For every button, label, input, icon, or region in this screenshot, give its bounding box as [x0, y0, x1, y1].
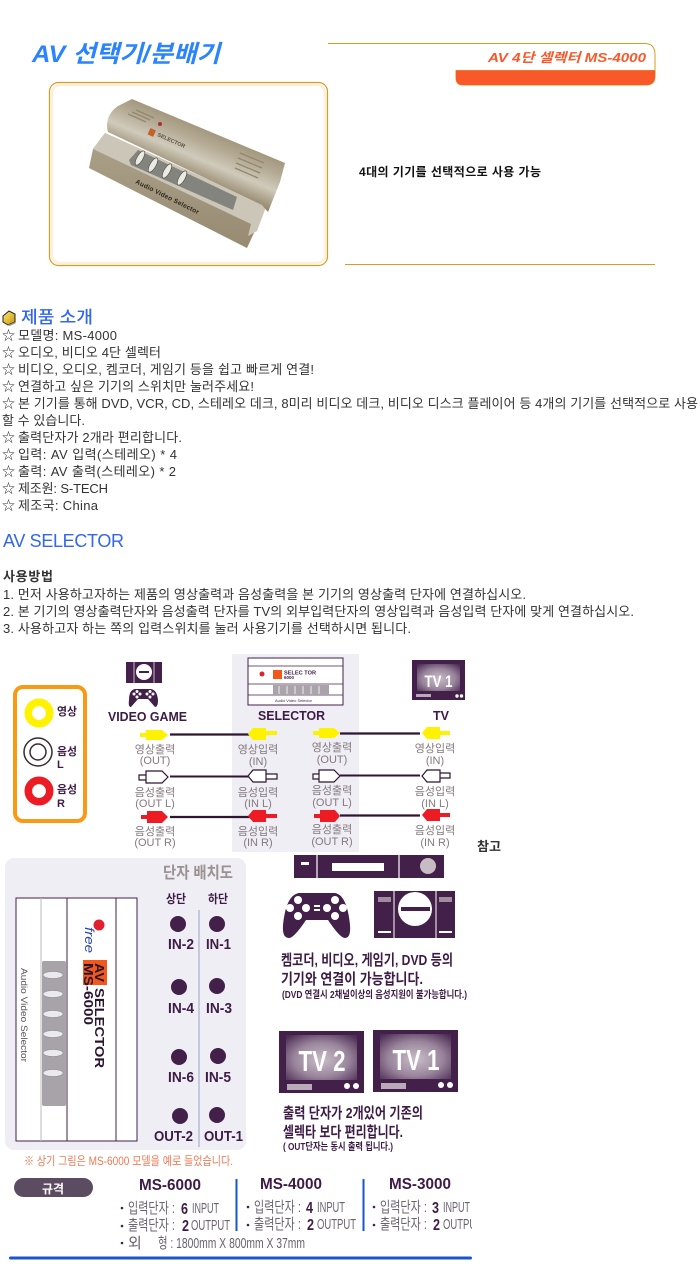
text block: usage steps: [3, 587, 634, 636]
panel: product model heading: AV 4단 셀렉터 MS-4000: [487, 50, 647, 65]
text block: product feature list: 입력: AV 입력(스테레오) * 4: [18, 447, 177, 462]
labels: connector names: (OUT): [140, 755, 170, 767]
panel rule: [345, 264, 655, 265]
specs: MS-6000: [121, 1200, 305, 1252]
diagram: device top view: AV: [92, 963, 107, 982]
terminal labels: IN-4: [168, 1000, 195, 1017]
text block: product feature list: 출력단자가 2개라 편리합니다.: [18, 430, 182, 445]
specs: MS-6000: 외: [128, 1235, 142, 1252]
icon: selector device: [248, 658, 343, 705]
text block: product feature list: 본 기기를 통해 DVD, VCR, CD, 스테레오 데크, 8미리 비디오 데크, 비디오 디스크 플레이어 등 4개의 기기를 선택적으로 사용: [18, 396, 698, 411]
text block: feature summary: 4대의 기기를 선택적으로 사용 가능: [359, 164, 541, 179]
text block: product feature list: ☆: [2, 464, 15, 479]
panel: specifications: [9, 1176, 482, 1260]
icon: TV 2: TV 2: [298, 1046, 346, 1078]
note: example model: ※ 상기 그림은 MS-6000 모델을 예로 들었습니다.: [24, 1154, 233, 1168]
specs: MS-4000: 4: [306, 1200, 313, 1217]
icon: AV selector device: Audio Video Selector: [134, 179, 200, 216]
icon: TV 2: [279, 1031, 364, 1093]
heading: AV SELECTOR: AV SELECTOR: [3, 531, 124, 551]
icon: AV selector device: SELECTOR: [156, 132, 186, 150]
cable: audio right (red): [141, 809, 450, 823]
specs: MS-3000: 입력단자 :: [380, 1199, 427, 1216]
labels: connector names: (IN): [426, 755, 444, 767]
specs: MS-4000: 2: [307, 1217, 314, 1234]
text block: product feature list: ☆: [2, 362, 15, 377]
text block: dual outputs: [283, 1105, 423, 1153]
specs: MS-3000: INPUT: [443, 1199, 470, 1216]
specs: MS-4000: OUTPUT: [317, 1216, 356, 1233]
heading: product introduction: 제품 소개: [21, 308, 93, 327]
labels: connector names: 영상출력: [312, 741, 352, 754]
terminal dots: [170, 916, 226, 1124]
specs: MS-3000: 3: [432, 1200, 439, 1217]
icon: selector device: SELEC TOR: [284, 670, 316, 676]
specs: MS-4000: [247, 1199, 356, 1234]
specs: MS-3000: 2: [433, 1217, 440, 1234]
label: spec pill: 규격: [42, 1182, 64, 1196]
text block: usage steps: 2. 본 기기의 영상출력단자와 음성출력 단자를 TV의 외부입력단자의 영상입력과 음성입력 단자에 맞게 연결하십시오.: [3, 604, 634, 619]
model names: MS-6000: [139, 1177, 201, 1194]
labels: connector names: (OUT R): [134, 837, 176, 849]
labels: connector names: 영상입력: [415, 742, 455, 755]
panel: product model heading: [328, 44, 655, 85]
icon: AV selector device: [89, 99, 285, 248]
labels: connector names: (OUT L): [312, 797, 352, 809]
specs: MS-3000: [372, 1200, 472, 1231]
text block: dual outputs: 출력 단자가 2개있어 기존의: [283, 1105, 423, 1122]
labels: connector names: 음성출력: [135, 786, 175, 799]
model names: [140, 1178, 450, 1190]
text block: product feature list: ☆: [2, 379, 15, 394]
legend: cable colours: 음성: [57, 745, 77, 758]
icon: gold cube bullet: [3, 311, 16, 326]
label: TV: TV: [433, 709, 450, 723]
terminal labels: IN-6: [168, 1069, 194, 1086]
text block: product feature list: ☆: [2, 396, 15, 411]
text block: dual outputs: ( OUT단자는 동시 출력 됩니다.): [283, 1140, 393, 1153]
panel: product photo: [50, 82, 328, 266]
text block: usage steps: 3. 사용하고자 하는 쪽의 입력스위치를 눌러 사용기기를 선택하시면 됩니다.: [3, 621, 411, 636]
text block: compatible devices: 기기와 연결이 가능합니다.: [281, 971, 423, 988]
terminal labels: IN-2: [168, 936, 194, 953]
diagram: device top view: free: [82, 927, 97, 953]
title: AV 선택기/분배기: [31, 41, 223, 68]
specs: MS-6000: INPUT: [192, 1200, 219, 1217]
legend: cable colours: R: [57, 798, 65, 810]
specs: MS-6000: 형 : 1800mm X 800mm X 37mm: [158, 1235, 305, 1252]
label: reference note: 참고: [477, 839, 501, 854]
specs: MS-3000: OUTPUT: [443, 1216, 482, 1233]
icon: selector device: Audio Video Selector: [275, 699, 313, 703]
panel: terminal layout: [5, 858, 246, 1150]
legend: cable colours: [15, 687, 85, 821]
diagram: device top view: Audio Video Selector: [19, 968, 29, 1062]
model names: MS-3000: [389, 1176, 451, 1193]
heading: usage: 사용방법: [3, 569, 53, 584]
labels: connector names: (IN R): [420, 837, 450, 849]
text block: compatible devices: 켐코더, 비디오, 게임기, DVD 등의: [281, 952, 453, 969]
text block: usage steps: 1. 먼저 사용하고자하는 제품의 영상출력과 음성출력을 본 기기의 영상출력 단자에 연결하십시오.: [3, 587, 526, 602]
icon: TV 1 large: TV 1: [392, 1045, 440, 1077]
legend: cable colours: 음성: [57, 783, 77, 796]
text block: product feature list: ☆: [2, 498, 15, 513]
icon: TV 1 large: [373, 1030, 458, 1092]
specs: MS-6000: 2: [182, 1218, 189, 1235]
text block: product feature list: 할 수 있습니다.: [2, 413, 85, 428]
panel: terminal layout: 상단: [166, 892, 186, 906]
labels: connector names: 음성출력: [312, 823, 352, 836]
labels: connector names: 음성입력: [415, 824, 455, 837]
specs: MS-6000: 입력단자 :: [128, 1200, 175, 1217]
legend: cable colours: 영상: [57, 705, 77, 718]
specs: MS-4000: 출력단자 :: [254, 1216, 301, 1233]
text block: product feature list: 출력: AV 출력(스테레오) * 2: [18, 464, 176, 479]
labels: connector names: (OUT): [317, 754, 347, 766]
labels: connector names: (IN): [249, 756, 267, 768]
diagram: device top view: [16, 898, 137, 1141]
diagram: device top view: MS-6000: [81, 963, 96, 1025]
specs: MS-3000: 출력단자 :: [380, 1216, 427, 1233]
terminal labels: OUT-2: [154, 1128, 193, 1145]
text block: compatible devices: (DVD 연결시 2채널이상의 음성지원이 불가능합니다.): [282, 988, 467, 1001]
terminal labels: [154, 936, 243, 1145]
text block: product feature list: [2, 328, 698, 513]
label: VIDEO GAME: VIDEO GAME: [108, 710, 187, 724]
labels: connector names: 음성입력: [415, 785, 455, 798]
icon: VCR deck: [294, 855, 444, 878]
labels: connector names: (OUT L): [135, 798, 175, 810]
cable: audio left (white): [139, 770, 450, 783]
icon: selector device: 6000: [284, 675, 295, 680]
terminal labels: IN-1: [206, 936, 231, 953]
text block: product feature list: ☆: [2, 447, 15, 462]
labels: connector names: 영상출력: [135, 743, 175, 756]
label: SELECTOR: SELECTOR: [258, 709, 325, 723]
specs: MS-4000: INPUT: [317, 1199, 345, 1216]
labels: connector names: 음성출력: [135, 825, 175, 838]
icon: gamepad: [129, 689, 158, 707]
labels: connector names: (IN L): [421, 798, 449, 810]
text block: product feature list: 제조원: S-TECH: [18, 481, 108, 496]
text block: product feature list: 연결하고 싶은 기기의 스위치만 눌러주세요!: [18, 379, 254, 394]
text block: product feature list: 오디오, 비디오 4단 셀렉터: [18, 345, 161, 360]
label: spec pill: [14, 1178, 93, 1197]
legend: cable colours: L: [57, 759, 64, 771]
specs: MS-6000: 출력단자 :: [128, 1217, 175, 1234]
icon: TV 1: TV 1: [424, 672, 452, 691]
text block: product feature list: ☆: [2, 481, 15, 496]
text block: compatible devices: [281, 952, 467, 1001]
text block: product feature list: 비디오, 오디오, 켐코더, 게임기 등을 쉽고 빠르게 연결!: [18, 362, 314, 377]
labels: connector names: 영상입력: [238, 743, 278, 756]
text block: product feature list: 제조국: China: [18, 498, 99, 513]
icon: large console: [374, 891, 455, 938]
diagram: device top view: SELECTOR: [92, 988, 107, 1069]
model names: MS-4000: [260, 1176, 322, 1193]
labels: connector names: 음성입력: [238, 786, 278, 799]
specs: MS-6000: 6: [181, 1201, 188, 1218]
labels: connector names: 음성출력: [312, 784, 352, 797]
text block: product feature list: ☆: [2, 430, 15, 445]
text block: product feature list: 모델명: MS-4000: [18, 328, 117, 343]
terminal labels: IN-3: [206, 1000, 232, 1017]
panel: connection diagram: [15, 654, 465, 852]
terminal labels: IN-5: [205, 1069, 231, 1086]
text block: dual outputs: 셀렉타 보다 편리합니다.: [283, 1124, 403, 1141]
selector background: [232, 654, 359, 852]
specs: MS-4000: 입력단자 :: [254, 1199, 301, 1216]
icon: video game console: [126, 662, 162, 683]
panel: terminal layout: 하단: [208, 892, 228, 906]
icon: TV 1: [412, 660, 465, 700]
icon: large gamepad: [283, 893, 350, 938]
specs: MS-6000: OUTPUT: [191, 1217, 230, 1234]
labels: connector names: (OUT R): [311, 836, 353, 848]
cable: video (yellow): [140, 727, 450, 740]
labels: connector names: (IN R): [243, 837, 273, 849]
label: terminal layout heading: 단자 배치도: [163, 864, 233, 882]
labels: connector names: 음성입력: [238, 825, 278, 838]
labels: connector names: (IN L): [244, 798, 272, 810]
text block: product feature list: ☆: [2, 345, 15, 360]
text block: product feature list: ☆: [2, 328, 15, 343]
labels: connector names: [134, 741, 455, 849]
terminal labels: OUT-1: [204, 1128, 243, 1145]
